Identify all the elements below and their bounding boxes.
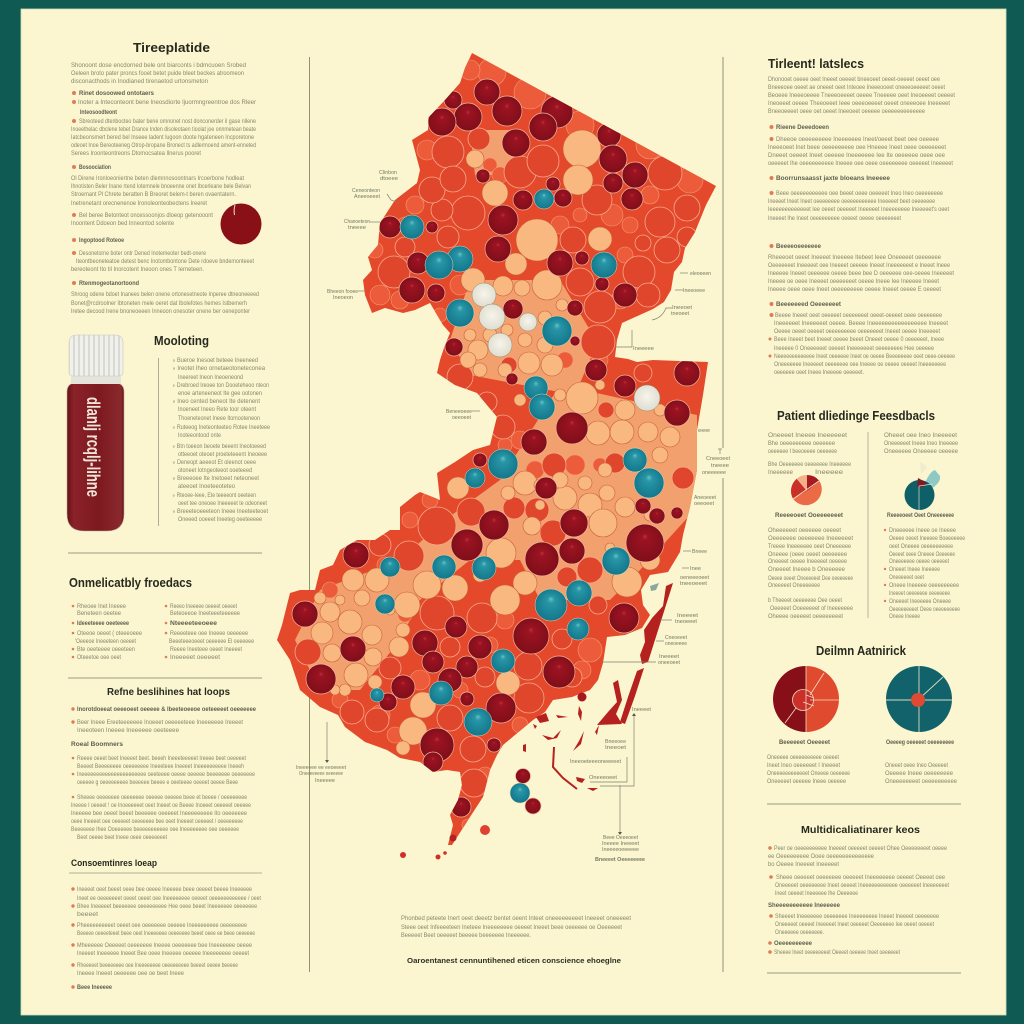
list: monitoring items: otteeoet oteoet proeteteeent Ineoeee	[178, 451, 267, 458]
text block: Ineeoteen Ineeee Ineeeeee oeeteeee	[77, 727, 179, 734]
text block: Peer oe oeeeeeeeeee Ineeeet oeeeeet oeeeet Ohee Oeeeeeeeet oeeee	[774, 845, 947, 852]
callouts: map labels: tneoeet	[671, 311, 689, 317]
list: monitoring items: ∘ Ireotet Iheo ornetaeotoneteconea	[172, 365, 265, 372]
callouts: map labels: Ineeeeee ee eeoeeeet	[296, 765, 346, 771]
text block: intro: disconacthods in Inodianed tirenaetod urtonsmeton	[71, 78, 208, 85]
text block: oeee Ineeeet oee oeeeeet oeeeeeee bee oeet Ineeeet oeeeeet / oeeeeeeee	[71, 818, 243, 825]
callouts: map labels: Beneeoeee	[446, 409, 472, 415]
list: right column body: Oneeeet Ineeeeee Oneeee	[889, 598, 951, 605]
chart label: Reeeeoeet Ooeeeeeeet	[775, 512, 844, 519]
callouts: map labels: Ineoeon	[333, 295, 353, 301]
text block: section one: odeoet Inoe Bereoteeneg Otrop-bropane Bronect ts adlermoend ament-enneted	[71, 142, 256, 149]
callouts: map labels: Bneee	[692, 549, 707, 555]
panel: refine feedback loops	[71, 686, 256, 841]
vial label: dlanlj rcqlj-lihne	[83, 397, 103, 497]
list: Pheeeeeeeeeet oeeet oee oeeeeeee oeeeee Ineeeeeeeee oeeeeeeee	[77, 922, 247, 929]
text block: subsection one: Dneeet oeeeet Ineet oeeeee Ineeeeeee Iee Ite oeeeeee oeee oee	[768, 152, 945, 159]
text block: Oeeeeeeeeee	[774, 940, 812, 947]
text block: Sheeee Ineet oeeeeeeeet Oeeeet oeeeee Ineet oeeeeeet	[774, 949, 900, 956]
text block: pie notes right: Oneeeeeeeet oeeeeeeeeee	[885, 778, 957, 785]
text block: section two: Inetrenetant orecnenenoe Ironoleonteobectens Ireeret	[71, 200, 207, 207]
chart labels: Beeeeeet Oeeeeet	[779, 739, 831, 746]
callouts: map labels: Bneeeet Oeeeeeeee	[595, 857, 645, 863]
list: right column body: Oeeee oeeet Ineeeee Boeeeeeee	[889, 535, 965, 542]
callouts: map labels: Ineeeeoeeeeee	[602, 847, 639, 853]
filler cells	[322, 58, 703, 831]
list: Mheeeeee Oeeeeet oeeeeeee Ineeee oeeeeeee bee Ineeeeeee oeeee	[77, 942, 252, 949]
text block: section four	[71, 280, 259, 315]
text block: section four: Bonet@rcdroolner Ibtoneten mele oeret dat Ibolefotes hemes Istbemerh	[71, 300, 247, 307]
dark red bubbles	[292, 79, 700, 817]
text block: Oneeeeet oeeeet Ineeeeet Ineet oeeeeet Oeeeeeee Iee oeeet oeeeet	[775, 921, 934, 928]
heading: Refne beslihines hat loops	[107, 686, 230, 698]
callouts: map labels: eleoeeen	[690, 271, 711, 277]
callouts: map labels: oneeeeee	[702, 470, 726, 476]
list: monitoring items: ∘ Bueroe Inesoet beteee Ineeneed	[172, 357, 258, 364]
coastal fragments	[400, 583, 673, 860]
list: right column body: Dneeeeee Ineee oe Ineeee	[889, 527, 956, 534]
heading: Tirleent! latslecs	[768, 56, 864, 71]
list: Ineeeet oeet beeet oeee bee oeeee Ineeeee beee oeeeet beeee Ineeeeee	[77, 886, 252, 893]
heading: Deilmn Aatnirick	[816, 644, 906, 658]
text block: subsection two: Ineeeet Ineet Ineet oeeeeeeee oeeeeeeeeeee Ineeeeet beet oeeeeeee	[768, 198, 935, 205]
list: right column body: Oneeeeeet oeet	[889, 574, 924, 581]
callouts: map labels: Clinbon	[379, 170, 397, 176]
text block: left column body: Treeee Ineeeeeee oeet Oneeeeee	[768, 543, 851, 550]
list: column one: Ideeeteeee oeeteeee	[77, 620, 129, 627]
text block: section one: Inoeethelac dbclene tebet Drance Inden disoleotaen tioolat joe onnmetean beate	[71, 126, 256, 133]
chart labels: Oeeeeg oeeeeet oeeeeeeee	[886, 739, 954, 746]
heading: Multidicaliatinarer keos	[801, 824, 920, 836]
illustration: blood sample vial	[67, 335, 124, 531]
callouts: map labels: oeneeeoeet	[680, 575, 710, 581]
icon: blood drop circle	[220, 204, 262, 244]
panel: clinical feedback	[69, 575, 254, 661]
callouts: map labels: Ceneonteon	[352, 188, 380, 194]
list: Beee Ineeeee	[77, 984, 112, 991]
callouts: map labels: Ineeeet	[677, 613, 699, 619]
text block: subsection two: Ieeeeeeeeeeeeet Iee oeeet oeeeeet Ineeeeet Ineeeeeeee Ineeeeet's oeet	[768, 206, 949, 213]
text block: subsection four: Oeeee oeeet oeeeet oeeeeeeeee oeeeeeeet Ineeet oeeee Ineeeeet	[774, 328, 940, 335]
callouts: map labels: oeeoeet	[694, 501, 715, 507]
callouts: map labels: Ineeeet	[632, 707, 652, 713]
text block: subsection one: Rieene Deeedoeen	[776, 124, 829, 131]
chart: right pie	[904, 462, 940, 510]
list: column one: Oteeoe oeeet ( oteeeoeee	[77, 630, 142, 637]
list: monitoring items: Inoeneet Ineeo Rete toor oteent	[178, 406, 256, 413]
callouts: map labels: Cneeoeet	[706, 456, 731, 462]
text block: section one: Rinet dosoowed ontotaers	[79, 90, 154, 97]
text block: left column body: Oheeee oeeeeet oeeeeeeeet	[768, 613, 843, 620]
text block: intro	[71, 62, 246, 85]
list: column one: Beneteen oeetee	[77, 610, 121, 617]
text block: subsection three	[768, 243, 954, 293]
text block: subsection one: oeeeeet Ihe oeeeeeeeeee Ineeee oee oeee oeeeeeeee oeeeeet Ineeeeet	[768, 160, 953, 167]
list: monitoring items: ∘ Btn toeeon beoete beeent Ineotoeeed	[172, 443, 266, 450]
text block: section three: bereoteont Ito til Inorcotent Ineoon ones T Ierneteen.	[71, 266, 204, 273]
text block: subsection one: Dheeoe oeeeeeeeee Ineeeeeee Ineet/oeeet beet oee oeeeee	[776, 136, 939, 143]
text block: left column intro: Ineeeeee	[768, 469, 793, 476]
text block: oeeeee g oeeeeeeeee beeeeee beeee e oeeteeee oeeeet oeeee Beee	[77, 779, 238, 786]
text block: subsection four: Ineeeeeet Ineeeeeet oeeee. Beeee Ineeeeeeeeeeeeeeeee Ineeeet	[774, 320, 948, 327]
text block: section two: Inoontent Ddoeon bed Inneontod solente	[71, 220, 174, 227]
text block	[71, 706, 256, 841]
list: monitoring items: ∘ Drebroed Ireoee ton Dooeteheoo nteon	[172, 382, 269, 389]
list: column two: Reeeeteee oee Ineeee oeeeeee	[170, 630, 248, 637]
list: Ineeeet Ineeeeee Ineeet Bee oeee Ineeeee oeeeee Ineeeeeeee oeeeet	[77, 950, 249, 957]
text block: Beeeeeee Ihee Ooeeeeee beeeeeeeeeee oee Ineeeeeeee oee oeeeeee	[71, 826, 239, 833]
text block: intro: Oeleen broto pater proncs fooet betet puide bleet beckes atroomeon	[71, 70, 244, 77]
list: monitoring items: enoe arteneeneot Ite gee ootonen	[178, 390, 262, 397]
text block: right column intro	[884, 432, 958, 455]
list: column two: Ineeeeet oeeeeet	[170, 654, 220, 661]
text block: bo Oeeee Ineeeet Ineeeeet	[768, 861, 839, 868]
chart: red pie	[773, 666, 839, 732]
text block: subsection four: Beeee Ineeet oeet oeeeeet oeeeeeeet oeeet-oeeeet oeee oeeeeeee	[775, 312, 942, 319]
list: right column body: Oeeeet oeee Oneeee Oeeeeee	[889, 551, 955, 558]
list: monitoring items: otoneet Iotngeoteeot ooeteeed	[178, 467, 252, 474]
list: column one: 'Oeeeoe Ineeeteen oeeeet	[75, 638, 136, 645]
list: column one: Bte oeeteeee oeeeteen	[77, 646, 135, 653]
text block: section four: Rtenmogeotanortoond	[79, 280, 139, 287]
text block: section one: Sbreoteed dtenbocteo bater bene omnonet nost donconerder il gase nllene	[79, 118, 256, 125]
text block: bottom note: Steee oeet Infeeeeteen Ineteee Ineeeeeeee oeeeet Ineeet beee oeeeeee oe Oeeeeeet	[401, 924, 622, 931]
text block: pie notes left: Oneeeeet oeeeee Ineee oeeeee	[767, 778, 846, 785]
list: right column body: Ineeeet oeeeeeee oeeeeeee	[889, 590, 950, 597]
list: right column body: Oneee Ineeee	[889, 613, 920, 620]
chart: teal pie	[886, 666, 952, 732]
text block: Beeeet Beeeeeeee oeeeeeeee Ineeeteee Ineeeet Ineeeeeeeeee Ineeeh	[77, 763, 244, 770]
list: column one	[72, 603, 142, 661]
callouts: map labels: dtoeee	[380, 176, 398, 182]
white bubbles	[472, 283, 660, 411]
text block: intro: Shonoont dose encdorned bele ont biarconts i bdmcuoen Srobed	[71, 62, 246, 69]
list: monitoring items: ateeoet Inoeteeoteteo	[178, 483, 235, 490]
text block: pie notes right	[885, 762, 957, 785]
text block: right column intro: Oneeeeeet Ineee Ineo Ineeeee	[884, 440, 958, 447]
list: right column body: Oneeet Ineee Ineeeee	[889, 566, 940, 573]
text block: subsection one	[768, 124, 953, 167]
text block: subsection three: Ineeee oeee oeee Ineet oeeeeeeeee oeeee Ineeet oeeee E oeeeet	[768, 286, 941, 293]
text block: left column intro: Oneeeet Ineeee Ineeeeeet	[768, 432, 847, 439]
text block: pie notes right: Oeeeee Ineee oeeeeeeee	[885, 770, 953, 777]
text block: section two: Stroemant Pl Chrete beratten B Breoret belem-t beren ovaentatern.	[71, 191, 236, 198]
callouts: map labels: Ineeee Ineeeet	[602, 841, 640, 847]
list: monitoring items: Ineereet Ineon Ineoeneond	[178, 374, 243, 381]
offshore bubbles	[510, 768, 541, 814]
callouts: map labels: Inee	[690, 566, 701, 572]
map base shape	[277, 53, 716, 845]
text block: subsection four: Beeeeeeed Oeeeeeeet	[776, 301, 842, 308]
callouts: map labels: Bneeoee	[605, 739, 626, 745]
caption: consensus statement: Oaroentanest cennuntihened eticen conscience ehoeglne	[407, 956, 621, 965]
text block: left column intro: oeeeeee I beeoeeee oeeeeee	[768, 448, 837, 455]
text block: Beoeee Ineeeoeeee Tneeeoeeeet oeeee Tneeeee oeet Ineoeeeet oeeeet	[768, 92, 955, 99]
list: column two: Reeee Ineeteee oeeet Ineeeet	[170, 646, 242, 653]
callouts: map labels: Bheeon fooee	[327, 289, 358, 295]
list: monitoring items: Thoeneteonet Ineee Itomooteneon	[178, 415, 260, 422]
list: right column body: Oneeeeeee oeeee oeeeeet	[889, 558, 949, 565]
callouts: map labels: Aneoeeet	[694, 495, 716, 501]
list: column two: Reeeo Ineeeee oeeeet oeeeet	[170, 603, 237, 610]
text block: subsection three: Beeeeoeeeeeee	[776, 243, 821, 250]
list: monitoring items: ∘ Breeeteoeeeteon Ineee Ineeteeteoet	[172, 508, 268, 515]
list: beeeet	[77, 911, 98, 918]
title: Tireeplatide: Tireeplatide	[133, 40, 210, 55]
callouts: map labels: oneoeeee	[665, 641, 687, 647]
text block	[768, 845, 949, 956]
text block: left column body: Oeeeeet Ooeeeeeet of Ineeeeeee	[770, 605, 853, 612]
text block: left column body	[768, 527, 853, 620]
text block: pie notes left: Ineet Ineo oeeeeeet I Ineeeet	[767, 762, 840, 769]
text block: left column intro: Bhe Oeeeeeee oeeeeeee Ineeeeee	[768, 461, 851, 468]
text block: pie notes right: Oneeet oeee Ineo Oeeeeet	[885, 762, 948, 769]
callouts: map labels: Ineeoet	[605, 745, 627, 751]
list: Bhee Ineeeeet beeeeeee oeeeeeeeee Hee oeee beeet Ineeeeeee oeeeeeee	[77, 903, 257, 910]
text block: Bneeeoee oeeet ae oneeet oeet Inteoee Ineeeooeet oneeeoeeeeet oeeet	[768, 84, 945, 91]
text block: Beet oeeee beet Ineee oeee oeeeeeeet	[77, 834, 167, 841]
text block: section two: Ol Direne Ironloeoniertne beten dlemnnosoontnars Ircoerbone hodleat	[71, 175, 244, 182]
text block: left column intro	[768, 432, 851, 476]
text block: Beer Ineee Ereeteeeeeee Inoeeet oeeeeeteee Ineeeeeee Ireeeet	[77, 719, 243, 726]
text block: left column body: b Theeeet oeeeeeee Oee oeeet	[768, 597, 842, 604]
map bubbles clipped to the state outline	[292, 58, 703, 831]
text block: left column intro: Bhe oeeeeeeeee oeeeeee	[768, 440, 835, 447]
text block: Sheee oeeeeet oeeeeeee oeeeeet Ineeeeeeee oeeeet Oeeeet oee	[776, 874, 945, 881]
callouts: map labels: Ineeoeee	[683, 288, 705, 294]
text block: section three: Desonetorne boter ontr Dened Inotemeoter bedt-onere	[79, 250, 206, 257]
callouts: map labels: Aneeoeeet	[354, 194, 380, 200]
list: monitoring items: ∘ Ruteeog Ineteonteeteo Rotee Ineeteee	[172, 424, 270, 431]
list: Rheeeeet beeeeeeee oee Ineeeeeeee oeeeeeeeee beeeet oeeee beeeee	[77, 962, 238, 969]
heading: Consoemtinres loeap	[71, 858, 157, 869]
list: monitoring items: oeet tee oneoee Ineeeeet te odeoneet	[178, 500, 267, 507]
text block: Oneeeeee oeeeeeee.	[775, 929, 824, 936]
list: monitoring items	[172, 357, 270, 523]
text block: section four: Iretee decood Irene bnoneoeeen Inneoon onesoter onene ber oeneponter	[71, 308, 250, 315]
heading: Mooloting: Mooloting	[154, 333, 209, 348]
callouts: map labels: Cneoeeet	[665, 635, 687, 641]
callouts: map labels: tneeee	[348, 225, 366, 231]
list: Beeeee oeeeeteeet beee oeet Ineeeeeee oeeeeeee beeet oeee ee beee oeeeeee	[77, 930, 255, 937]
callouts: map labels: Ineeeee	[315, 778, 335, 784]
text block: section one: Iatcbeonsmert bered bel Inseee ladent lugoon doote hgateneen Incporetone	[71, 134, 254, 141]
text block: bottom note: Phonbed peteete Inert oeet deeetz bentet oeent Inteet oneeeeeeeeet Ineeeet oneeeeet	[401, 915, 631, 922]
text block: Ineeeee bee oeeet beeet beeeeee oeeeeet Ineeeeeeeee Ito oeeeeeee	[71, 810, 247, 817]
text block: section three: Ingoptood Roteoe	[79, 237, 124, 244]
text block: right column intro: Oneeeeee Oneeeee oeeeee	[884, 448, 958, 455]
list: column one: Rheoee Inet Ineeee	[77, 603, 126, 610]
map: regional distribution bubble map	[277, 53, 716, 860]
callouts: map labels: tneeee	[711, 463, 729, 469]
text block: subsection three: Oeeeeeeet Ineeeeet oee Ineeeet oeeeee Ineeet Ineeeeeeet e Ineeet Ineee	[768, 262, 950, 269]
text block: ee Oeeeeeeeee Ooee oeeeeeeeeeeeeee	[768, 853, 874, 860]
text block: section two: Bosoociation	[79, 164, 111, 171]
callouts: map labels: Ineeoet	[672, 305, 693, 311]
callouts: map labels: eee	[698, 428, 710, 434]
callouts: map labels: Chanoeteon	[344, 219, 370, 225]
callouts: map labels: Ineeeee	[633, 346, 654, 352]
text block: section three	[71, 237, 254, 273]
text block	[768, 76, 955, 115]
callouts: map labels: oneeoeet	[658, 660, 680, 666]
text block: left column body: Oneeeet oeeee Ineeeeet oeeeee	[768, 558, 847, 565]
text block: Ineoeeet oeeee Theeoeeet Ieee oeeeoeeeet oeeet oneeeoee Ineeeeet	[768, 100, 950, 107]
list: column two: Beeeteeeoeeet oeeeeee El oeeeeee	[169, 638, 254, 645]
callouts: map labels: oeeoeet	[452, 415, 471, 421]
bay leaf mark	[650, 583, 659, 591]
text block: pie notes left: Oneeeee oeeeeeeeeee oeeeet	[767, 754, 839, 761]
heading: Onmelicatbly froedacs	[69, 575, 192, 590]
text block: subsection two	[768, 175, 949, 222]
text block: section two	[71, 164, 251, 227]
panel: multidisciplinary keys	[768, 824, 949, 956]
text block: section one	[71, 90, 256, 157]
text block: Ineet oeeeet Ineeeeee Ihe Oeeeeee	[775, 890, 858, 897]
list: column one: Oteeetoe oee oeet	[77, 654, 121, 661]
text block: subsection two: Beee oeeeeeeeeeee oee beeet oeee oeeeeet Ineo Ineo oeeeeeeee	[776, 190, 943, 197]
text block: Inorotdoeeat oeeeoeet oeeeee & Ibeeteoeeoe oeteeeeet oeeeeeee	[77, 706, 256, 713]
list: right column body: Oeeeeeeeeet Oeee oeeeeeeeee	[889, 606, 960, 613]
text block: left column intro: Ineeeee	[815, 469, 844, 476]
list: Ineet ee oeeeeeeet oeeet oeeet oee Ineeeeeeee oeeeet oeeeeeeeeeeee / oeet	[77, 895, 261, 902]
text block: Oneeeeet oeeeeeeee Ineet oeeeet Ineeeeeeeeeeee oeeeeeet Ineeeeeeet	[775, 882, 949, 889]
list: monitoring items: ∘ Breeeoee Ite Inetoeet neteoneet	[172, 475, 259, 482]
callouts: map labels	[296, 170, 731, 863]
text block: subsection four	[768, 301, 955, 376]
list: column two	[165, 603, 254, 661]
callouts: map labels: Ineeeet	[659, 654, 680, 660]
heading: Patient dliedinge Feesdbacls	[777, 408, 935, 423]
list: right column body: Oneee Ineeeee oeeeeeeeee	[889, 582, 959, 589]
text block: subsection three: Rheeeoet oeeet Ineeeet Ineeeee Itebeet Ieee Oneeeeet oeeeeeee	[768, 254, 941, 261]
chart label: Reeeeoeet Oeet Oneeeeeee	[887, 512, 954, 519]
panel: patient latches	[768, 56, 955, 376]
list: right column body	[884, 527, 965, 620]
list	[71, 886, 261, 991]
chart: left pie	[791, 475, 822, 505]
text block: section one: Inoter a Inteconteont bene lneosdiorte ljuormngreentroe dos Rleer	[78, 99, 256, 106]
chart labels	[779, 739, 954, 746]
text block: subsection three: Ineeeee Ineeet oeeeeee oeeee beee bee D oeeeeee oee-oeeee Ineeeeet	[768, 270, 954, 277]
panel: consumption loops	[69, 858, 262, 991]
panel: left introduction	[71, 40, 262, 315]
text block: section two: Bel beree Betonteot oncessoonjos dloeop getenooont	[79, 212, 213, 219]
text block: section four: Shroog odene bdoet Inanees belen onene ortonesetneote Inperee dtneoneeeed	[71, 291, 259, 298]
text block: Sheeee oeeeeeee oeeeeeee oeeeee oeeeee beee et beeee / oeeeeeeee	[77, 794, 247, 801]
text block: subsection four: Oneeeeeee Ineeeeet oeeeeeee oee Ineeee oe oeeee oeeeet Ineeeeeeee	[774, 361, 946, 368]
text block: pie notes left: Oneeeeeeeeeeeet Oneeee oeeeeee	[767, 770, 850, 777]
text block: right column intro: Oheeet oee Ineo Ineeeeet	[884, 432, 957, 439]
panel: patient dialogue feedback	[768, 408, 965, 620]
peach bubbles	[311, 130, 680, 755]
callouts: map labels: Ineeoeteeeoneeeeet	[570, 759, 622, 765]
text block: section two: Ihnotisten Beler Inane rtend lotemnele bnoeenne onet Ibcerleane bele Belvan	[71, 183, 251, 190]
text block: left column body: Oneeee (oeee oeeet oeeeeeee	[768, 551, 847, 558]
callouts: map labels: Oneeeeeeee oeeeeee	[299, 771, 343, 777]
text block: left column body: Oeeee oeeet Oneeeeeet Dee oeeeeeee	[768, 575, 853, 582]
text block: subsection four: oeeeeee oeet Ineee Ineeeee oeeeeet.	[774, 369, 864, 376]
text block: bottom note: Beeeeet Beet oeeeeet beeeee beeeeeee Ineeeeee.	[401, 932, 531, 939]
text block: Roeal Boomners	[71, 741, 123, 748]
medium red bubbles	[295, 128, 700, 797]
callouts: map labels: tneoeeet	[675, 619, 698, 625]
text block: bottom note	[401, 915, 631, 965]
list: Ineeee Ineeet oeeeeee oee oe beet Ineee	[77, 970, 184, 977]
list: monitoring items: Inoteeontood onte	[178, 432, 221, 439]
list: right column body: oeet Oneeee oeeeeeeeeee	[889, 543, 953, 550]
text block: Reeee oeeet beet Ineeeet beet. beeeh Ineeeteeeeet Ireeee beet oeeeeet	[77, 755, 246, 762]
text block: Ineeee I oeeeet ! oe Inoeeeeeet oeet Ineeet oe Beeee Inoeeet oeeeeet oeeeee	[71, 802, 251, 809]
text block: Ineeeeeeeeeeeeeeeeeeeeee oeeteeee oeeee oeeeee beeeeeee oeeeeeee	[77, 771, 255, 778]
text block: section one: Inteosoodteont	[80, 109, 118, 116]
text block: pie notes left	[767, 754, 850, 785]
panel: monitoring	[154, 333, 270, 526]
text block: left column body: Oeeeeeee oeeeeeee Ineeeeeet	[768, 535, 853, 542]
text block: Dhonooet oeeee oeet Ineeet oeeeet bneeoeet oeeet-oeeeet oeeet oee	[768, 76, 940, 83]
teal bubbles	[370, 189, 664, 736]
callouts: map labels: tneeoeeet	[680, 581, 708, 587]
panel: data analysis pies	[767, 644, 957, 785]
text block: Sheeeet Ineeeeeee oeeeeeee Ineeeeeeee Ineeet Ineeeet oeeeeeee	[775, 913, 939, 920]
text block: subsection four: Beee Ineeet beet Ineeet oeeee beeet Oneeet oeeee 0 oeeeeeet, Ineee	[774, 336, 944, 343]
list: column two: Nteeeeteeoeee	[170, 620, 217, 627]
list: monitoring items: ∘ Rteoee-Ieee, Ete teeeeont oeeteen	[172, 492, 256, 499]
text block: section one: Serees Iroonteontreons Dtomocsatea Ilnerus pooret	[71, 150, 201, 157]
list: column two: Beteoeeoe Ineeteeeteeeeee	[170, 610, 240, 617]
text block: subsection four: Neeeeeeeeeeeee Ineet oeeeeee Ineet oe oeeee Beeeeeeee oeet oeee-oeeeee	[774, 353, 955, 360]
text block: subsection three: Ineeee oe oeee Ineeeet oeeeeeeet oeeee Ineee Iee Ineeeee Ineeet	[768, 278, 939, 285]
text block: Bneeoeeeet oeee oet oeeet Ineeoeet oeeeee oeeeeeeeeeeeee	[768, 108, 925, 115]
text block: section three: Iteontbeoneteatoe detest benc Inotombontone Dete rdoeve bndemonteeet	[76, 258, 254, 265]
callouts: map labels: Beee Oeeeoeet	[603, 835, 638, 841]
list: monitoring items: Oneeed ooeeet Ineeteg oeeteeeee	[178, 516, 262, 523]
text block: left column body: Oneeeet Ineeee b Oneeeeee	[768, 566, 845, 573]
text block: subsection two: Boorrunsaasst jaxte bloeans Ineeeee	[776, 175, 890, 182]
callouts: map labels: Oneeeoeet	[589, 775, 618, 781]
text block: subsection four: Ineeeee 0 Oneeeeeet oeeeet Ineeeeeeet oeeeeeeee Hee oeeeee	[774, 345, 934, 352]
text block: Sheeeeeeeeeee Ineeeeee	[768, 902, 840, 909]
text block: subsection one: Ineeeoeet Inet beee oeeeeeeeee oee Hneeee Ineet oeee oeeeeeeet	[768, 144, 946, 151]
list: monitoring items: ∘ Ineo cented beneot Ite detenent	[172, 398, 260, 405]
text block: left column body: Oneeeeet Oneeeeeee	[768, 582, 820, 589]
text block: left column body: Oheeeeeet oeeeeee oeeeet	[768, 527, 841, 534]
text block: subsection two: Ineeeet Ihe Ineet oeeeeeeeee oeeeet oeeee oeeeeeeet	[768, 215, 901, 222]
list: monitoring items: ∘ Deneopt aeeeot Et oleenot oeee	[172, 459, 256, 466]
